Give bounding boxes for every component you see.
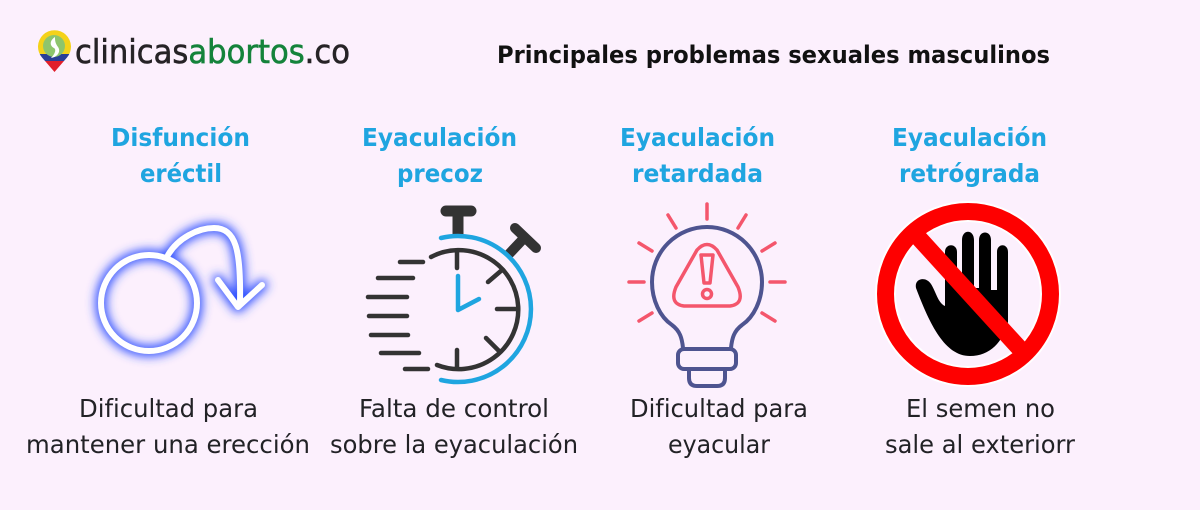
description [330, 394, 578, 459]
heading: Eyaculación [892, 123, 1047, 152]
description: Falta de control [359, 394, 549, 423]
heading: Disfunción [111, 123, 250, 152]
panel: eyaculación retardada [620, 123, 808, 459]
panel: disfunción eréctil [26, 123, 310, 459]
heading: retardada [632, 159, 763, 188]
description: sobre la eyaculación [330, 430, 578, 459]
heading [362, 123, 517, 188]
description: eyacular [668, 430, 771, 459]
heading: precoz [397, 159, 483, 188]
icon: neon male symbol with drooping arrow [101, 228, 262, 351]
description [885, 394, 1076, 459]
description: El semen no [906, 394, 1055, 423]
description: mantener una erección [26, 430, 310, 459]
logo [38, 30, 349, 72]
heading [892, 123, 1047, 188]
description: Dificultad para [79, 394, 258, 423]
heading: retrógrada [899, 159, 1040, 188]
heading: eréctil [140, 159, 222, 188]
icon: light bulb with warning [629, 204, 785, 386]
icon: map pin [38, 30, 71, 72]
icon: stopwatch [368, 211, 536, 382]
heading: Eyaculación [362, 123, 517, 152]
panel: eyaculación precoz [330, 123, 578, 459]
panel: eyaculación retrógrada [885, 123, 1076, 459]
icon: prohibited hand [886, 212, 1050, 376]
heading [111, 123, 250, 188]
title: Principales problemas sexuales masculinos [497, 41, 1050, 69]
logo wordmark: clinicasabortos.co [75, 32, 350, 71]
heading: Eyaculación [620, 123, 775, 152]
description [630, 394, 808, 459]
description: sale al exteriorr [885, 430, 1076, 459]
heading [620, 123, 775, 188]
description [26, 394, 310, 459]
description: Dificultad para [630, 394, 808, 423]
